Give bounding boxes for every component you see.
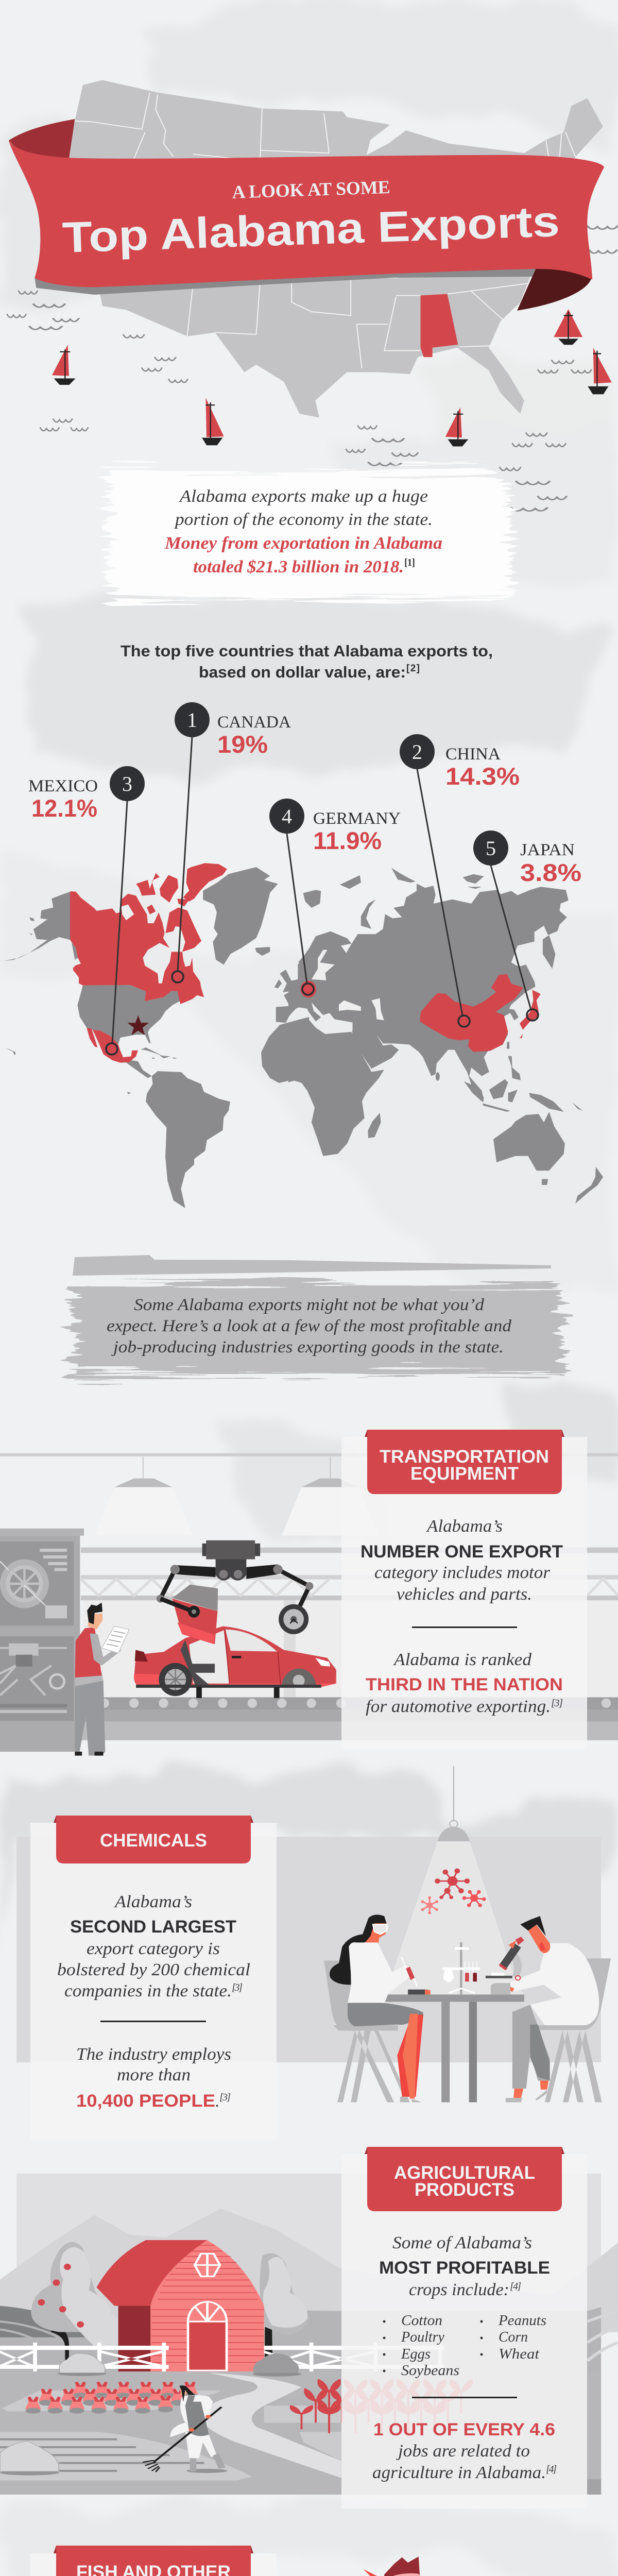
grey land: Alaska, USA, Greenland, South America, Europe west, Africa west [3,867,309,1208]
callout: grey brush intro to industries [72,1255,562,1375]
carrots [25,2381,198,2414]
label: Germany 11.9%: 11.9% [313,827,382,854]
fact 2: more than [117,2065,191,2084]
ribbon front [9,141,604,287]
brush text: job-producing industries exporting goods in the state. [111,1338,504,1357]
section tab: TRANSPORTATION [380,1447,549,1467]
icon: Alabama star [128,1015,149,1035]
intro text: portion of the economy in the state. [174,510,433,529]
fact 1: MOST PROFITABLE [379,2258,550,2278]
great bear and slave lakes [121,905,134,920]
fact 2: for automotive exporting. [366,1697,551,1716]
pin 2 China [400,734,470,1027]
pin 3 Mexico [106,766,145,1055]
lab backdrop [16,1837,601,2062]
section tab [54,2546,253,2576]
pin 4 Germany [269,799,314,995]
label: Germany 11.9% [313,809,401,854]
label: China 14.3%: CHINA [445,745,501,764]
intro text: Money from exportation in Alabama [164,534,442,553]
waves [7,226,617,511]
fact 1: Alabama’s [114,1892,192,1911]
grey land [288,868,603,1204]
red car [134,1626,336,1698]
brush text: Some Alabama exports might not be what you’d [134,1296,485,1314]
label: Mexico 12.1% [28,777,98,822]
man chair [537,1958,611,2102]
Alabama state [421,294,458,357]
section tab [365,2147,564,2211]
fields [0,2306,618,2495]
lab glassware [442,1942,480,1994]
section tab: CHEMICALS [100,1831,207,1851]
factory structure [0,1453,618,1699]
pin 3 Mexico: 3 [122,772,132,795]
crop list: Eggs [401,2346,431,2362]
table [385,1994,524,2102]
fact 1: SECOND LARGEST [70,1917,236,1937]
fact 2 [372,2420,557,2482]
label: Mexico 12.1%: 12.1% [31,794,97,822]
woman chair [324,1960,410,2102]
illustration: car factory [0,1453,618,1756]
crop list: Corn [499,2329,528,2345]
intro text: totaled $21.3 billion in 2018. [193,557,404,577]
heading: top five countries [121,642,493,681]
panel: fish and other marine products [30,2546,277,2576]
fact 2: 1 OUT OF EVERY 4.6 [373,2420,555,2439]
label: Canada 19%: CANADA [217,713,291,732]
crop list: Peanuts [498,2313,546,2329]
crop list: Wheat [499,2346,540,2362]
illustration: farm [0,2174,618,2495]
farmer with rake [143,2385,228,2473]
fact 1: crops include: [409,2280,509,2299]
crop list: Poultry [401,2329,445,2345]
crop list [383,2313,546,2379]
fact 2: 10,400 PEOPLE [76,2091,215,2111]
section tab [365,1430,564,1494]
card [30,1823,277,2140]
white brush stroke [107,471,512,600]
fact 2: [3] [551,1698,563,1709]
panel: agricultural products [341,2147,587,2509]
label: Canada 19% [217,713,291,758]
fish [364,2556,426,2576]
molecules [421,1869,486,1914]
title: Top Alabama Exports: Top Alabama Exports [61,197,560,262]
crop list: Soybeans [401,2363,459,2379]
pin 2 China: 2 [412,740,422,764]
illustration: fisherman [16,2556,601,2576]
fact 1: Some of Alabama’s [392,2233,532,2252]
icon: sailboats [52,309,612,446]
fact 1 [379,2233,550,2299]
fact 1: companies in the state. [64,1981,232,2001]
label: Mexico 12.1%: MEXICO [28,777,98,795]
section tab: EQUIPMENT [410,1464,519,1484]
pin 1 Canada: 1 [187,708,197,732]
label: Japan 3.8%: 3.8% [520,859,581,886]
heading: top five countries: based on dollar value, are: [199,663,406,681]
highlighted: Japan [520,990,541,1038]
fact 1: NUMBER ONE EXPORT [360,1542,563,1562]
Eurasia, Africa, Australia [288,868,603,1204]
fact 2: [3] [219,2092,231,2103]
fact 1: bolstered by 200 chemical [57,1960,250,1979]
callout: white brush intro [107,471,512,600]
woman scientist [330,1914,431,2102]
fact 2: The industry employs [76,2045,231,2064]
Americas and Atlantic [3,863,309,1208]
chart: world map with highlighted countries [3,863,603,1208]
label: Japan 3.8%: JAPAN [520,841,575,859]
fact 2 [366,1650,563,1716]
label: Canada 19%: 19% [217,731,268,758]
fact 2: jobs are related to [396,2442,530,2461]
fact 1 [360,1517,563,1604]
fact 1: [3] [232,1982,243,1993]
trees [31,2242,310,2371]
robotic arm [157,1540,313,1619]
fact 2 [76,2045,231,2111]
card [341,1437,587,1749]
intro text: [1] [404,557,415,568]
intro text [164,487,442,577]
fact 2: Alabama is ranked [393,1650,532,1669]
intro text: Alabama exports make up a huge [179,487,428,506]
conveyor belt [0,1697,618,1740]
map: United States with Alabama highlighted [67,80,603,417]
bushes [0,2353,301,2476]
label: Germany 11.9%: GERMANY [313,809,401,828]
section tab [54,1816,253,1863]
brush text: expect. Here’s a look at a few of the most profitable and [107,1317,512,1335]
pin 1 Canada [172,702,210,982]
man scientist [486,1916,599,2102]
person with clipboard [75,1603,129,1756]
banner ribbon [9,119,604,311]
fact 1: category includes motor [374,1563,551,1582]
brush text [107,1296,512,1357]
title: A LOOK AT SOME: A LOOK AT SOME [232,177,390,202]
pin 5 Japan [473,831,538,1021]
fact 1: Alabama’s [426,1517,503,1536]
fact 1 [57,1892,250,2001]
fact 2: THIRD IN THE NATION [366,1675,563,1694]
section tab: PRODUCTS [415,2180,514,2200]
highlighted: China [420,974,523,1052]
loose wheel [279,1604,308,1634]
inland seas [312,950,384,1020]
panel: chemicals [30,1816,277,2140]
label: China 14.3% [445,745,520,790]
fact 1: [4] [510,2281,521,2292]
label: China 14.3%: 14.3% [445,762,520,790]
panel: transportation equipment [341,1430,587,1749]
illustration: chemistry lab [16,1766,611,2102]
highlighted: Mexico [87,1028,138,1063]
barn [96,2240,264,2371]
pin 4 Germany: 4 [282,805,292,828]
grey brush stroke [72,1255,562,1375]
label: Japan 3.8% [520,841,581,886]
crop sprouts [290,2379,473,2433]
fact 2: agriculture in Alabama. [372,2463,546,2482]
highlighted: Canada [70,863,227,1004]
fact 2: . [215,2092,219,2111]
highlighted: Germany [301,981,316,997]
fact 2: [4] [546,2464,557,2475]
fence [0,2343,444,2371]
heading: top five countries: [2] [406,663,420,674]
control machine [0,1529,84,1752]
fact 1: export category is [87,1939,220,1958]
ribbon back folds [9,119,592,311]
section tab: AGRICULTURAL [394,2163,535,2183]
ceiling lamp [385,1766,524,1994]
car door on arm [160,1585,218,1644]
card [341,2154,587,2509]
crop list: Cotton [401,2313,442,2329]
heading: top five countries: The top five countries that Alabama exports to, [121,642,493,660]
card [30,2553,277,2576]
fact 1: vehicles and parts. [397,1585,532,1604]
pin 5 Japan: 5 [486,837,496,860]
sky and hills [0,2174,618,2332]
